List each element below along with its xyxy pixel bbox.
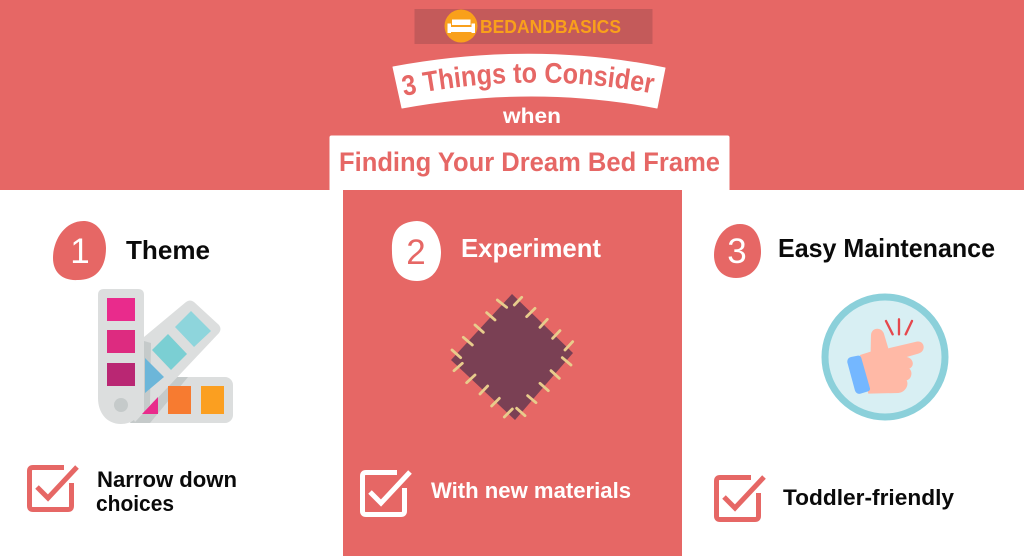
heading: theme: Theme xyxy=(126,235,210,265)
checkbox 1 xyxy=(30,467,77,510)
point: with new materials: With new materials xyxy=(431,478,631,503)
logo xyxy=(414,9,652,44)
number badge 1 xyxy=(53,221,106,280)
title box xyxy=(330,136,730,192)
point: toddler-friendly: Toddler-friendly xyxy=(783,485,955,510)
subtitle: when: when xyxy=(502,105,561,128)
heading: experiment: Experiment xyxy=(461,233,601,263)
number badge 3 xyxy=(714,224,761,278)
point: narrow down choices xyxy=(96,467,237,516)
point: narrow down choices: choices xyxy=(96,491,174,516)
panel: experiment xyxy=(343,190,682,556)
number badge 3: 3 xyxy=(727,232,747,271)
icon: stitched fabric patch xyxy=(451,294,573,420)
panel: easy maintenance xyxy=(714,224,995,520)
number badge 2: 2 xyxy=(406,233,426,272)
title box: Finding Your Dream Bed Frame xyxy=(339,147,720,177)
heading: easy maintenance: Easy Maintenance xyxy=(778,233,995,263)
icon: snapping hand xyxy=(825,297,945,417)
header panel xyxy=(0,0,1024,190)
icon: colour swatches xyxy=(98,289,233,424)
checkbox 3 xyxy=(716,477,764,520)
logo: BEDANDBASICS xyxy=(480,16,621,37)
title ribbon: 3 Things to Consider xyxy=(402,62,655,96)
point: narrow down choices: Narrow down xyxy=(97,467,237,492)
number badge 2 xyxy=(392,221,441,281)
number badge 1: 1 xyxy=(70,232,90,271)
checkbox 2 xyxy=(362,472,410,514)
panel: theme xyxy=(30,221,237,516)
